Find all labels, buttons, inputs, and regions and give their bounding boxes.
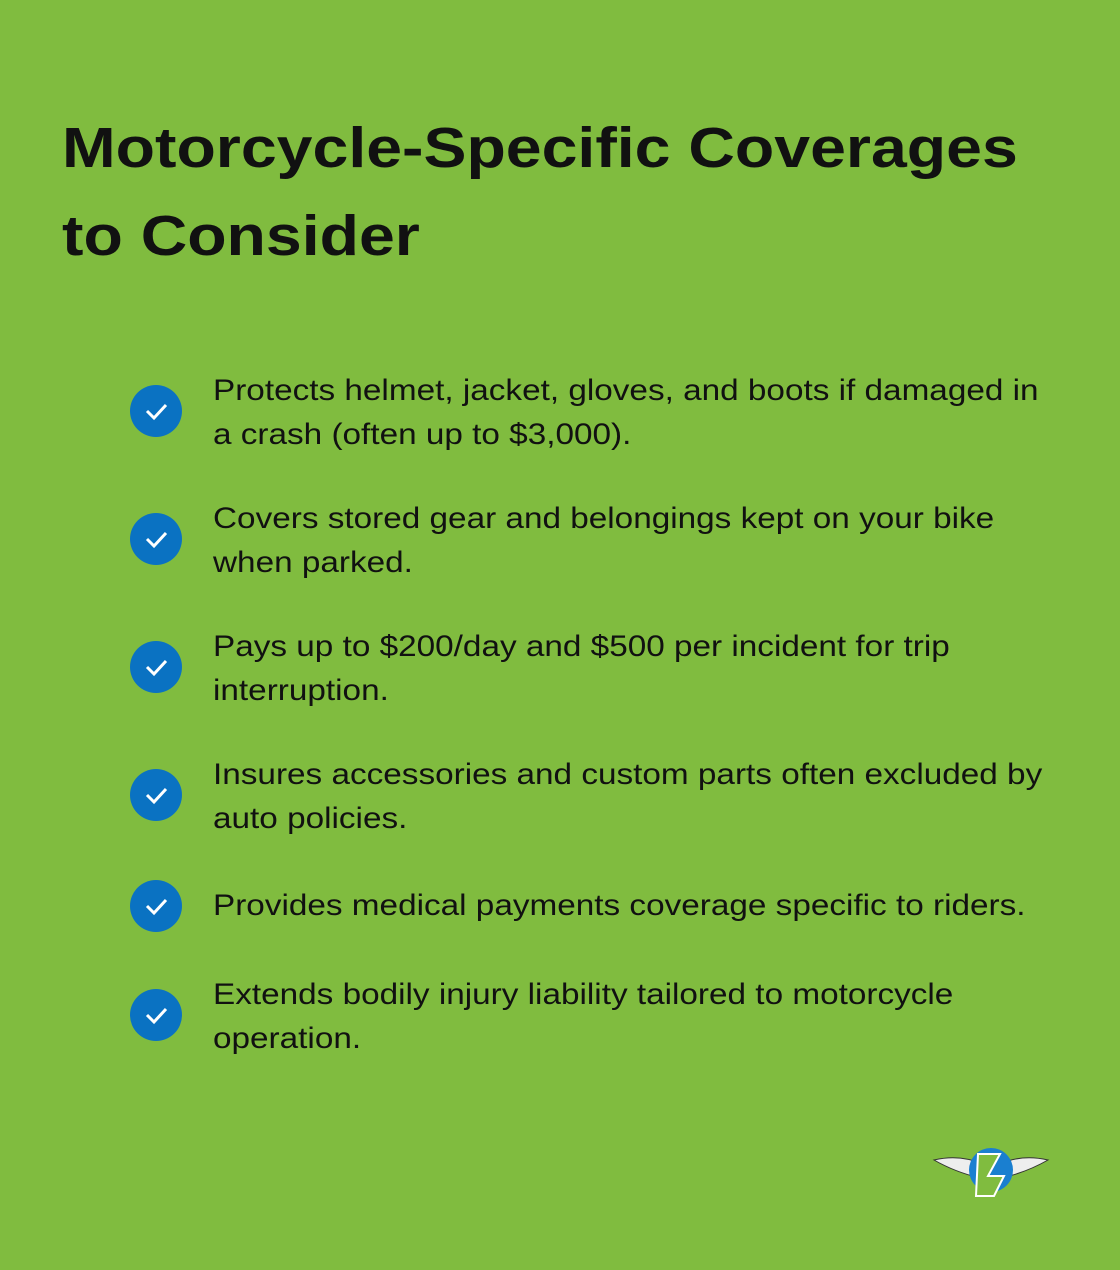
logo <box>932 1148 1050 1197</box>
title: to Consider <box>62 204 420 268</box>
text <box>213 374 1039 451</box>
text: Protects helmet, jacket, gloves, and boots if damaged in <box>213 374 1039 407</box>
item 2 <box>130 502 994 579</box>
icon: check <box>130 641 182 693</box>
icon: check <box>130 989 182 1041</box>
text <box>213 758 1042 835</box>
item 3 <box>130 630 950 707</box>
text: Provides medical payments coverage specific to riders. <box>213 889 1026 922</box>
text: when parked. <box>213 546 413 579</box>
item 5 <box>130 880 1026 932</box>
title: Motorcycle-Specific Coverages <box>62 116 1018 180</box>
item 1 <box>130 374 1039 451</box>
text: interruption. <box>213 674 389 707</box>
icon: check <box>130 880 182 932</box>
text <box>213 630 950 707</box>
icon: check <box>130 769 182 821</box>
text <box>213 502 994 579</box>
text <box>213 978 953 1055</box>
text: Insures accessories and custom parts often excluded by <box>213 758 1042 791</box>
text: a crash (often up to $3,000). <box>213 418 631 451</box>
text: auto policies. <box>213 802 407 835</box>
text: Covers stored gear and belongings kept on your bike <box>213 502 994 535</box>
text: Pays up to $200/day and $500 per incident for trip <box>213 630 950 663</box>
item 6 <box>130 978 953 1055</box>
icon: check <box>130 513 182 565</box>
text: Extends bodily injury liability tailored to motorcycle <box>213 978 953 1011</box>
title <box>62 116 1018 268</box>
icon: check <box>130 385 182 437</box>
text: operation. <box>213 1022 361 1055</box>
item 4 <box>130 758 1042 835</box>
